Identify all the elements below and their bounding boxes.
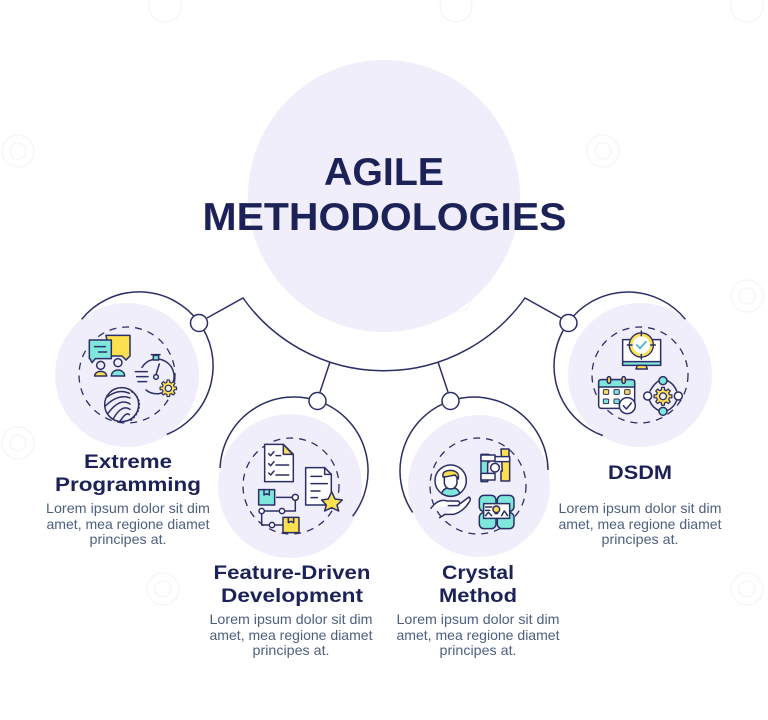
description: Lorem ipsum dolor sit dim [210, 611, 372, 627]
description: Lorem ipsum dolor sit dim [396, 611, 560, 627]
panel: DSDM: amet, mea regione diamet [558, 516, 722, 532]
heading: DSDM [608, 463, 672, 484]
panel: Extreme Programming: principes at. [90, 531, 166, 547]
icon: team chat, stopwatch and globe [89, 335, 177, 422]
panel: Extreme Programming: amet, mea regione diamet [46, 516, 210, 532]
panel: Extreme Programming: Programming [55, 475, 201, 496]
title: AGILE [324, 151, 444, 194]
panel: Feature-Driven Development [210, 392, 373, 658]
heading: Crystal [442, 563, 514, 584]
heading: Extreme [84, 452, 172, 473]
icon: checklist, document and workflow [259, 444, 342, 533]
title: METHODOLOGIES [202, 196, 566, 239]
description: Lorem ipsum dolor sit dim [558, 500, 722, 516]
panel: Crystal Method [396, 392, 560, 658]
panel: Crystal Method: amet, mea regione diamet [396, 627, 560, 643]
panel: Crystal Method: principes at. [440, 642, 516, 658]
panel: DSDM [554, 292, 722, 547]
description: Lorem ipsum dolor sit dim [46, 500, 210, 516]
icon: person in hand, teamwork hands and idea board [431, 449, 514, 529]
title [202, 151, 566, 239]
heading: Feature-Driven [214, 563, 370, 584]
connector network [207, 298, 561, 392]
panel: Feature-Driven Development: Development [221, 586, 364, 607]
panel: DSDM: principes at. [602, 531, 678, 547]
icon: monitor, calendar and process gear [599, 331, 682, 415]
panel: Extreme Programming [46, 292, 213, 547]
panel: Crystal Method: Method [439, 586, 517, 607]
panel: central title circle [248, 60, 520, 332]
panel: Feature-Driven Development: amet, mea regione diamet [210, 627, 373, 643]
panel: Feature-Driven Development: principes at. [252, 642, 330, 658]
